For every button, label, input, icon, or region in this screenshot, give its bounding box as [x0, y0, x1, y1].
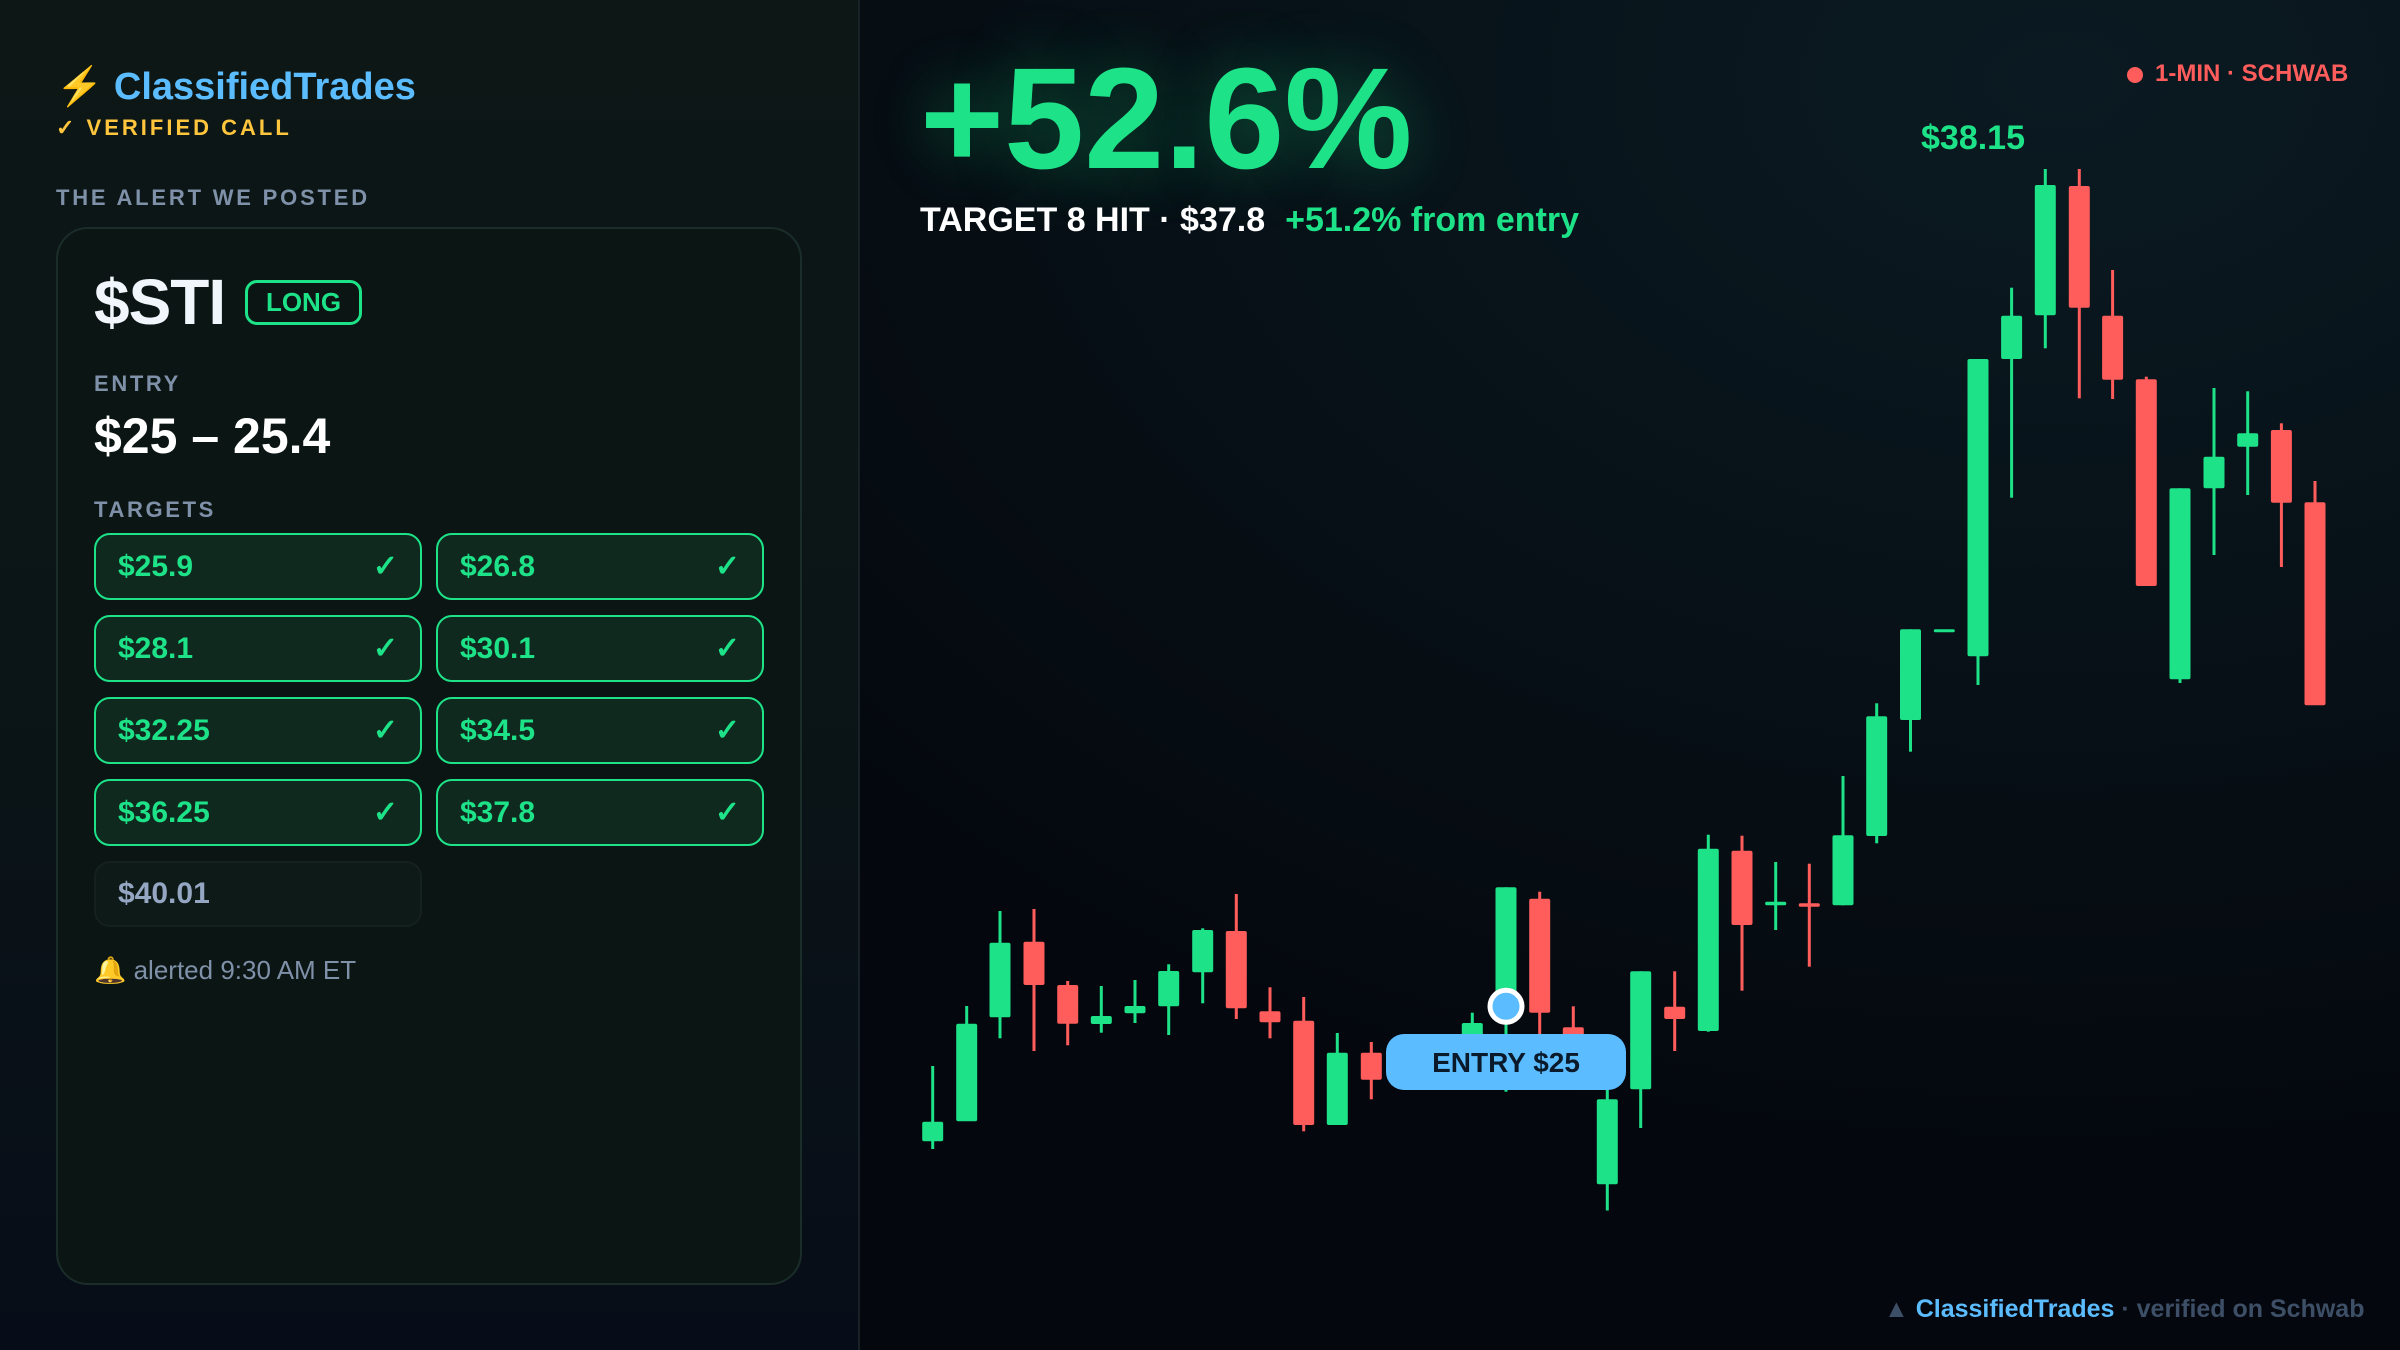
- target 6: ✓: [715, 714, 740, 747]
- entry label: [1386, 1034, 1626, 1090]
- target 6: [436, 697, 764, 764]
- candle 17: [1462, 1013, 1483, 1063]
- candle 33: [2001, 288, 2022, 498]
- candle 1: [922, 1066, 943, 1149]
- candle 30: [1900, 629, 1921, 752]
- candle 38: [2170, 488, 2190, 683]
- target 5: ✓: [373, 714, 398, 747]
- candle 13: [1327, 1033, 1348, 1125]
- long badge: [245, 280, 362, 325]
- alert time: 🔔 alerted 9:30 AM ET: [94, 955, 356, 985]
- footer credit: ▲ ClassifiedTrades · verified on Schwab: [1884, 1295, 2364, 1323]
- target 2: [436, 533, 764, 600]
- candle 10: [1226, 894, 1247, 1019]
- target 2: $26.8: [460, 550, 535, 583]
- candle 26: [1765, 862, 1786, 930]
- target 7: [94, 779, 422, 846]
- candle 31: [1934, 629, 1955, 632]
- candle 39: [2204, 388, 2224, 555]
- candle 4: [1024, 909, 1044, 1051]
- target 2: ✓: [715, 550, 740, 583]
- target 8: $37.8: [460, 796, 535, 829]
- target 3: [94, 615, 422, 682]
- candle 34: [2035, 169, 2056, 348]
- target 5: [94, 697, 422, 764]
- target 5: $32.25: [118, 714, 210, 747]
- long badge: LONG: [266, 287, 341, 317]
- entry label: ENTRY $25: [1432, 1047, 1580, 1078]
- candle 2: [956, 1006, 977, 1121]
- target 4: [436, 615, 764, 682]
- candle 25: [1732, 836, 1752, 991]
- target 1: [94, 533, 422, 600]
- candle 19: [1529, 892, 1550, 1052]
- candle 6: [1091, 986, 1112, 1033]
- headline gain: +52.6%: [920, 38, 1412, 199]
- entry range: $25 – 25.4: [94, 408, 330, 464]
- target 7: $36.25: [118, 796, 210, 829]
- target 3: ✓: [373, 632, 398, 665]
- candle 12: [1293, 997, 1314, 1131]
- target 8: [436, 779, 764, 846]
- target 6: $34.5: [460, 714, 535, 747]
- target 8: ✓: [715, 796, 740, 829]
- target 4: ✓: [715, 632, 740, 665]
- target 9 not hit: $40.01: [118, 877, 210, 910]
- panel: chart area: [860, 0, 2400, 1350]
- chart source tag: 1-MIN · SCHWAB: [2155, 60, 2348, 87]
- entry marker: [1490, 990, 1522, 1022]
- candle 32: [1968, 359, 1988, 685]
- candle 37: [2136, 377, 2157, 586]
- candle 21: [1597, 1080, 1618, 1210]
- targets label: TARGETS: [94, 497, 216, 522]
- candle 5: [1057, 981, 1078, 1045]
- candle 9: [1192, 928, 1213, 1003]
- candle 29: [1866, 703, 1887, 843]
- candle 27: [1799, 864, 1820, 967]
- target hit subline: TARGET 8 HIT · $37.8 +51.2% from entry: [920, 201, 1579, 239]
- panel: alert sidebar: [0, 0, 860, 1350]
- candle 8: [1158, 964, 1179, 1035]
- candle 22: [1630, 971, 1651, 1128]
- candle 24: [1698, 835, 1719, 1032]
- candle 35: [2069, 169, 2090, 398]
- candle 42: [2304, 481, 2326, 705]
- candle 18: [1496, 887, 1516, 1092]
- target 1: ✓: [373, 550, 398, 583]
- high price label: $38.15: [1921, 119, 2025, 157]
- target 3: $28.1: [118, 632, 193, 665]
- verified call badge: ✓ VERIFIED CALL: [56, 115, 292, 140]
- target 7: ✓: [373, 796, 398, 829]
- entry label: ENTRY: [94, 371, 181, 396]
- section label: THE ALERT WE POSTED: [56, 185, 370, 210]
- candle 23: [1664, 971, 1685, 1051]
- candle 40: [2237, 391, 2258, 495]
- ticker: $STI: [94, 266, 225, 338]
- candle 20: [1563, 1006, 1584, 1057]
- target 1: $25.9: [118, 550, 193, 583]
- candle 3: [990, 911, 1010, 1038]
- brand heading: ⚡ ClassifiedTrades: [56, 66, 416, 108]
- panel: alert card: [56, 227, 802, 1285]
- candle 14: [1361, 1042, 1382, 1099]
- candle 36: [2102, 270, 2123, 399]
- target 4: $30.1: [460, 632, 535, 665]
- target 9 not hit: [94, 861, 422, 927]
- candle 28: [1832, 776, 1854, 905]
- candle 41: [2271, 423, 2292, 567]
- candle 11: [1260, 987, 1280, 1038]
- candle 7: [1124, 980, 1146, 1023]
